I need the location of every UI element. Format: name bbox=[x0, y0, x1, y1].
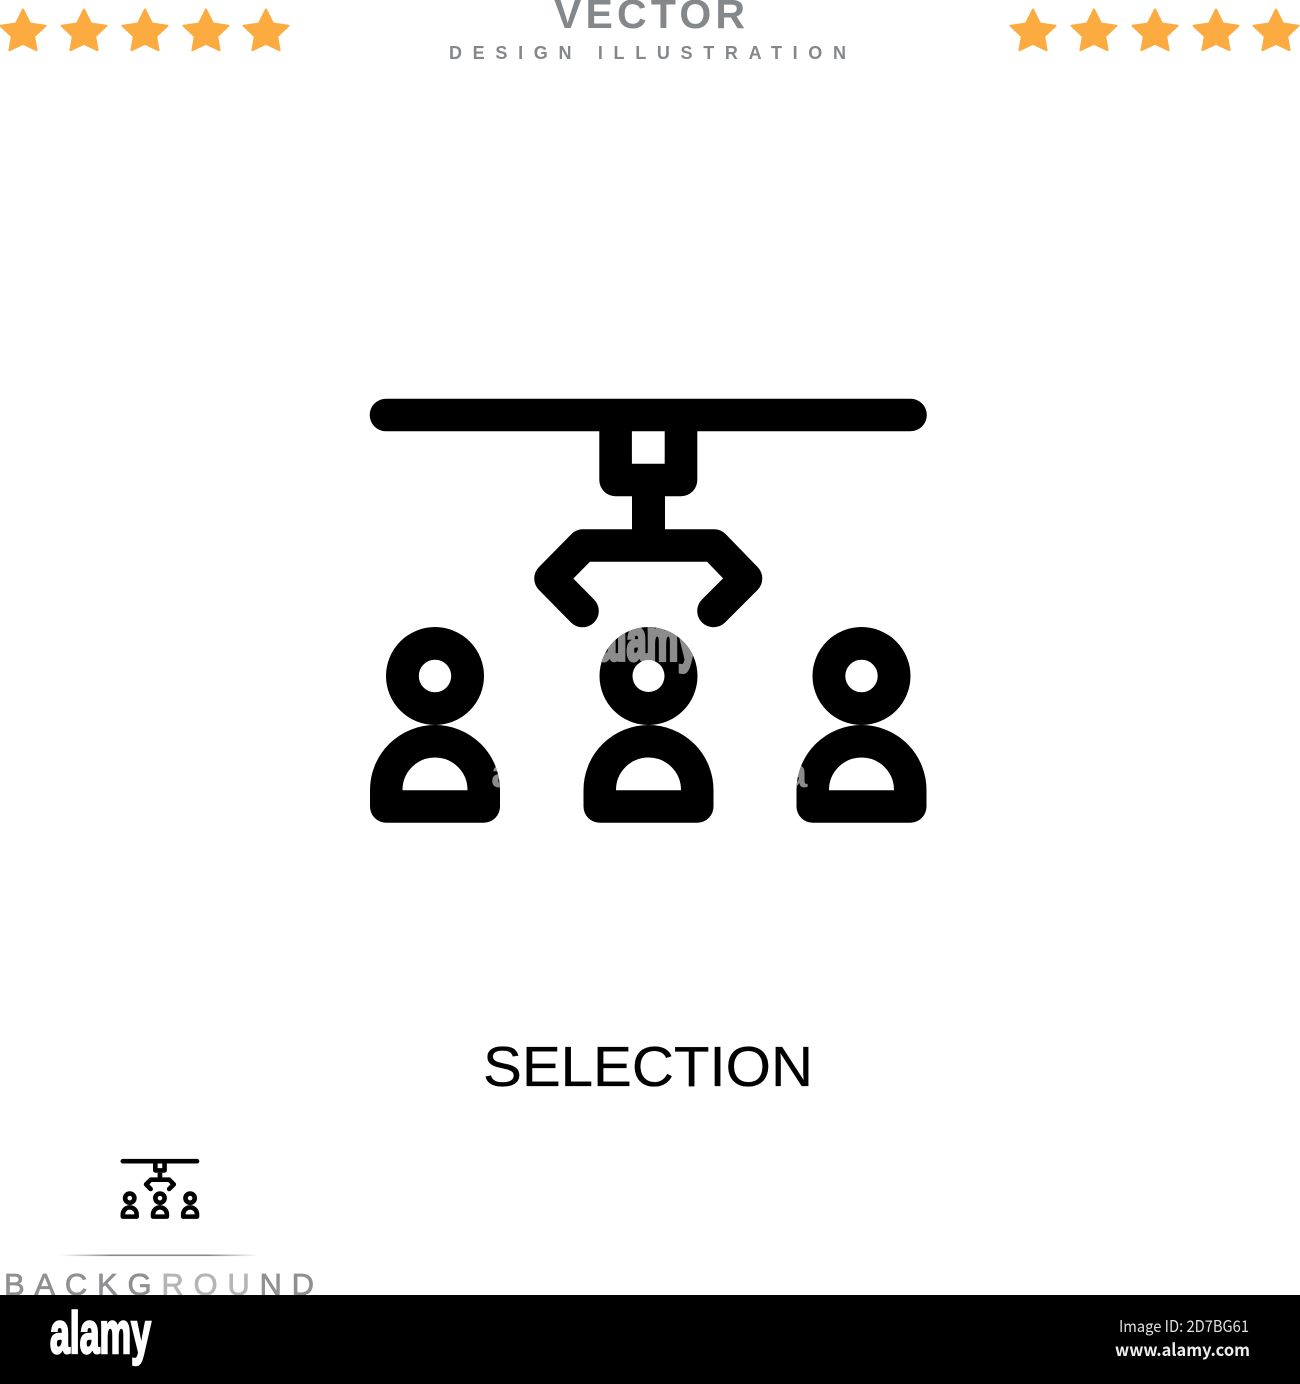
icon part: claw bbox=[550, 546, 746, 611]
footer logo: alamy: alamy bbox=[50, 1301, 151, 1366]
small icon: selection preview bbox=[123, 1161, 197, 1217]
icon part: overhead rail bbox=[386, 399, 910, 431]
person: centre bbox=[597, 608, 698, 806]
subheading: design illustration: DESIGN ILLUSTRATION bbox=[449, 43, 846, 63]
icon part: stem bbox=[632, 496, 665, 536]
person: right: a bbox=[784, 749, 808, 796]
star rating: top right bbox=[1010, 10, 1298, 50]
person: left bbox=[386, 643, 515, 806]
footer text: website: www.alamy.com bbox=[1115, 1336, 1250, 1361]
label: background: BACKG ROU ND bbox=[4, 1267, 314, 1302]
person: centre: alamy bbox=[597, 608, 698, 673]
footer text: image id: Image ID: 2D7BG61 bbox=[1119, 1313, 1249, 1337]
icon part: carriage bbox=[616, 425, 681, 480]
icon: selection claw over three people bbox=[386, 415, 910, 806]
person: right bbox=[784, 643, 910, 806]
star rating: top left bbox=[0, 10, 288, 50]
title: selection: SELECTION bbox=[483, 1035, 813, 1099]
person: left: a bbox=[491, 749, 515, 796]
footer bar bbox=[0, 1295, 1300, 1384]
